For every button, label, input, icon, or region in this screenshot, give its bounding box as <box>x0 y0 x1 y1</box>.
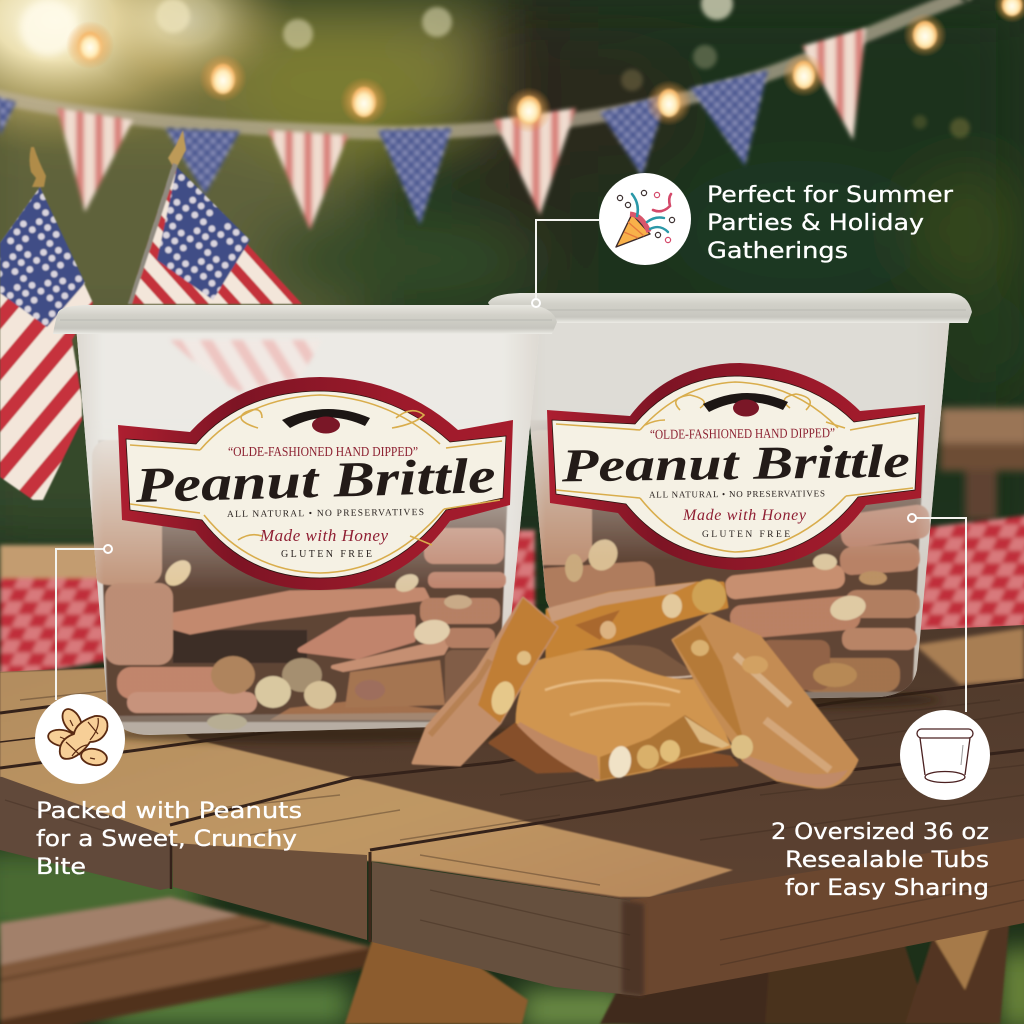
icon: tub <box>900 710 990 800</box>
connector line <box>536 220 599 298</box>
sunlit part of surface <box>0 668 733 897</box>
caption: Resealable Tubs <box>785 847 989 873</box>
wood grain <box>5 690 1024 970</box>
label: Peanut Brittle <box>560 436 910 492</box>
caption: Packed with Peanuts <box>36 798 302 824</box>
label <box>547 363 925 570</box>
caption: Perfect for Summer <box>707 182 954 208</box>
caption <box>36 798 302 880</box>
caption: Bite <box>36 854 86 880</box>
hollow behind centre piece <box>590 645 705 680</box>
left plank front face <box>0 777 170 890</box>
caption: for Easy Sharing <box>785 875 989 901</box>
left leaning piece <box>413 598 557 765</box>
string of bunting <box>0 0 966 133</box>
label: GLUTEN FREE <box>702 530 790 540</box>
back piece <box>490 723 737 772</box>
label: ALL NATURAL • NO PRESERVATIVES <box>649 488 825 500</box>
picnic bench <box>0 897 372 1024</box>
label <box>118 377 513 590</box>
plank seams <box>0 680 1024 942</box>
checked tablecloth <box>0 515 1024 680</box>
brittle inside left tub <box>70 325 540 735</box>
centre piece <box>517 651 730 780</box>
caption <box>707 182 954 264</box>
label: GLUTEN FREE <box>281 549 372 560</box>
caption <box>771 819 989 901</box>
right piece <box>673 615 857 787</box>
callout: tubs <box>771 514 990 901</box>
label: Made with Honey <box>259 526 388 545</box>
caption: for a Sweet, Crunchy <box>36 826 297 852</box>
tub emblem <box>703 393 788 416</box>
tub body <box>520 315 950 702</box>
tub emblem <box>282 409 370 434</box>
grass below table <box>0 850 1024 1024</box>
table surface <box>0 625 1024 902</box>
label: Made with Honey <box>682 507 807 524</box>
label: “OLDE-FASHIONED HAND DIPPED” <box>650 425 835 442</box>
connector line <box>56 549 104 700</box>
tub body <box>76 325 540 735</box>
lid <box>488 293 972 323</box>
shadow under tubs <box>100 691 940 743</box>
icon: peanuts <box>35 694 125 784</box>
left tub <box>53 305 557 735</box>
picnic table <box>0 625 1024 996</box>
string lights <box>66 0 1024 133</box>
loose peanut brittle pieces <box>413 579 857 787</box>
table legs <box>345 915 1010 1024</box>
middle plank front face <box>172 843 367 940</box>
top piece <box>547 583 727 657</box>
label: Peanut Brittle <box>134 447 496 513</box>
flag seen through tub <box>170 340 322 392</box>
right flag <box>128 130 302 304</box>
pennant banners <box>0 28 866 230</box>
connector line <box>916 518 966 712</box>
long side face <box>630 838 1024 996</box>
blurred bench behind the table <box>940 408 1024 520</box>
caption: Parties & Holiday <box>707 210 924 236</box>
icon: party popper <box>599 173 691 265</box>
left flag <box>0 147 93 500</box>
American flags <box>0 130 302 500</box>
caption: Gatherings <box>707 238 848 264</box>
caption: 2 Oversized 36 oz <box>771 819 989 845</box>
front plank end grain <box>372 862 640 996</box>
callout: party <box>532 173 954 307</box>
right tub <box>488 293 972 705</box>
label: ALL NATURAL • NO PRESERVATIVES <box>227 508 424 520</box>
callout: peanuts <box>35 545 302 880</box>
brittle inside right tub <box>515 315 955 705</box>
label: “OLDE-FASHIONED HAND DIPPED” <box>228 445 418 460</box>
lid <box>53 305 557 334</box>
